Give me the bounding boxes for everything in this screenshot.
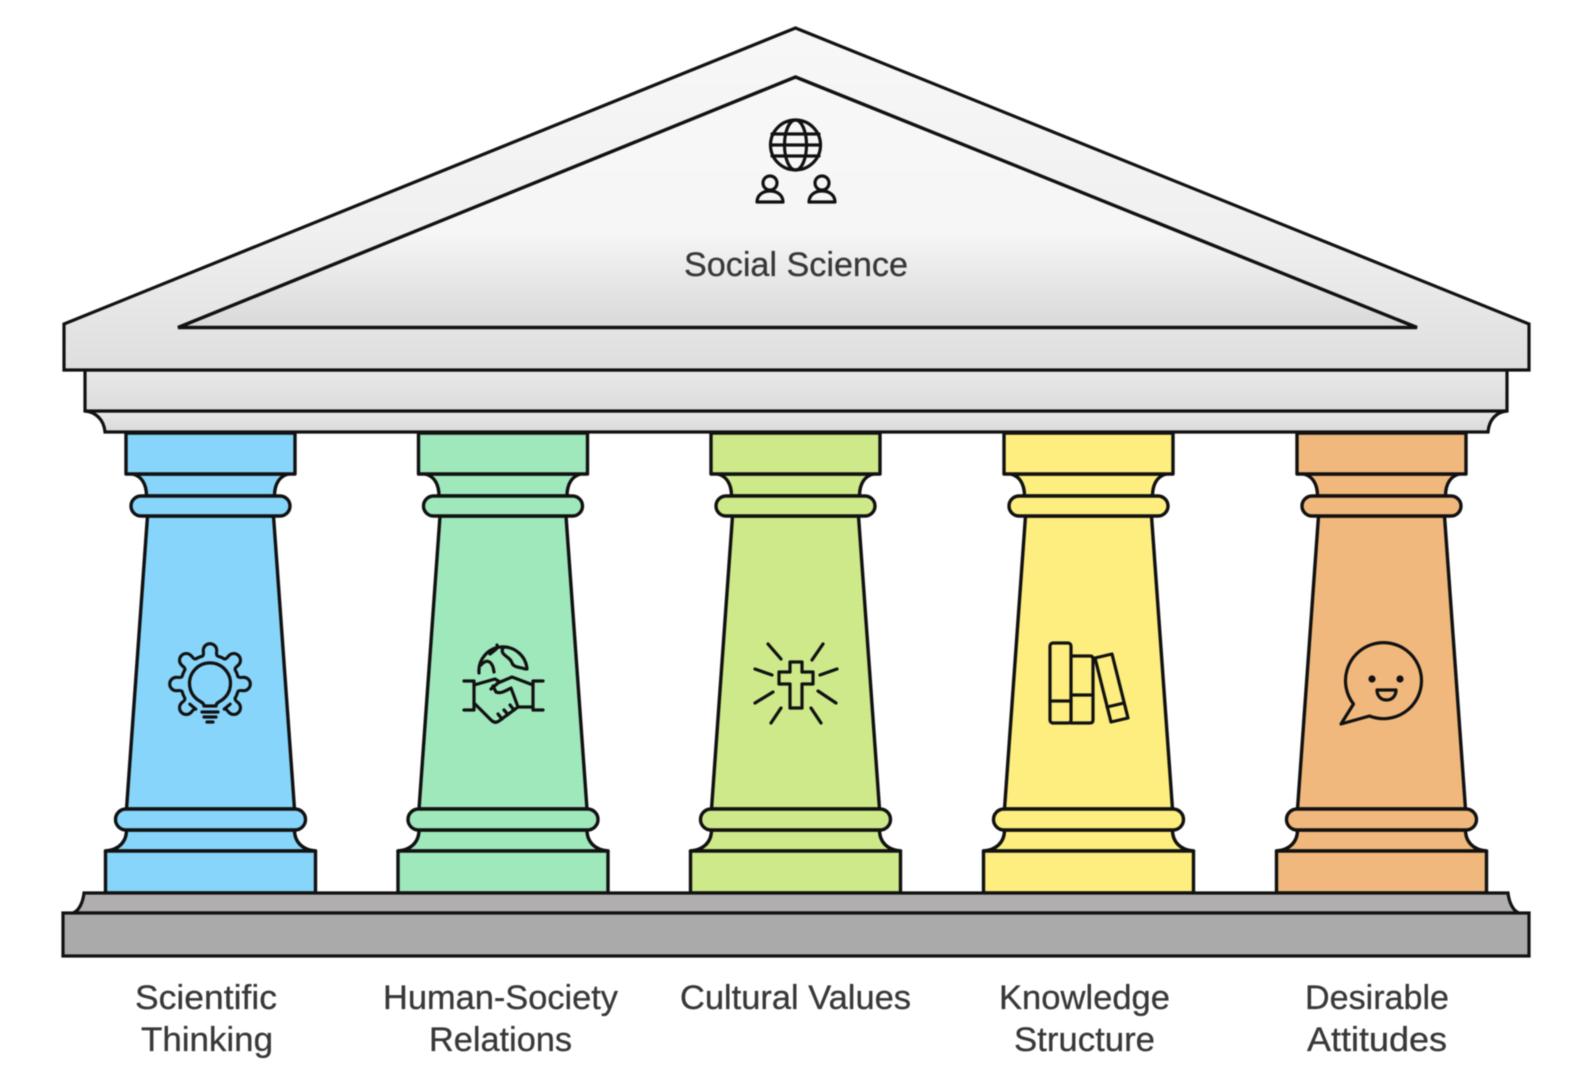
pediment inner triangle — [178, 77, 1417, 328]
label: Knowledge Structure — [999, 979, 1170, 1059]
column: Cultural Values — [690, 433, 900, 893]
label: Cultural Values: Cultural Values — [680, 979, 911, 1017]
architrave — [85, 370, 1507, 411]
icon: radiant cross — [755, 644, 837, 723]
label: Human-Society Relations: Human-Society — [383, 979, 618, 1017]
label: Scientific Thinking: Scientific — [135, 979, 277, 1017]
column: Knowledge Structure — [984, 433, 1194, 893]
label: Scientific Thinking: Thinking — [141, 1021, 273, 1059]
icon: books — [1050, 643, 1128, 723]
label: Human-Society Relations: Relations — [429, 1021, 572, 1059]
icon: person left — [757, 176, 783, 202]
icon: globe — [770, 120, 820, 170]
icon: globe and people — [757, 120, 835, 202]
label: Knowledge Structure: Knowledge — [999, 979, 1170, 1017]
pediment — [64, 28, 1529, 370]
label: Desirable Attitudes: Desirable — [1305, 979, 1449, 1017]
label: Knowledge Structure: Structure — [1014, 1021, 1155, 1059]
label: Scientific Thinking — [135, 979, 277, 1059]
icon: smiling speech bubble — [1341, 643, 1421, 724]
icon: gear with light bulb — [170, 644, 250, 722]
label: Desirable Attitudes: Attitudes — [1307, 1021, 1447, 1059]
base upper plinth — [73, 893, 1519, 913]
base lower slab — [63, 913, 1529, 956]
icon: person right — [809, 176, 835, 202]
column: Human-Society Relations — [398, 433, 608, 893]
label: Human-Society Relations — [383, 979, 618, 1059]
column: Scientific Thinking — [106, 433, 316, 893]
temple roof — [64, 28, 1529, 432]
label: Desirable Attitudes — [1305, 979, 1449, 1059]
icon: handshake under globe — [464, 645, 543, 722]
column: Desirable Attitudes — [1276, 433, 1486, 893]
entablature molding — [85, 411, 1507, 432]
temple base — [63, 893, 1529, 956]
heading: Social Science: Social Science — [684, 246, 908, 284]
